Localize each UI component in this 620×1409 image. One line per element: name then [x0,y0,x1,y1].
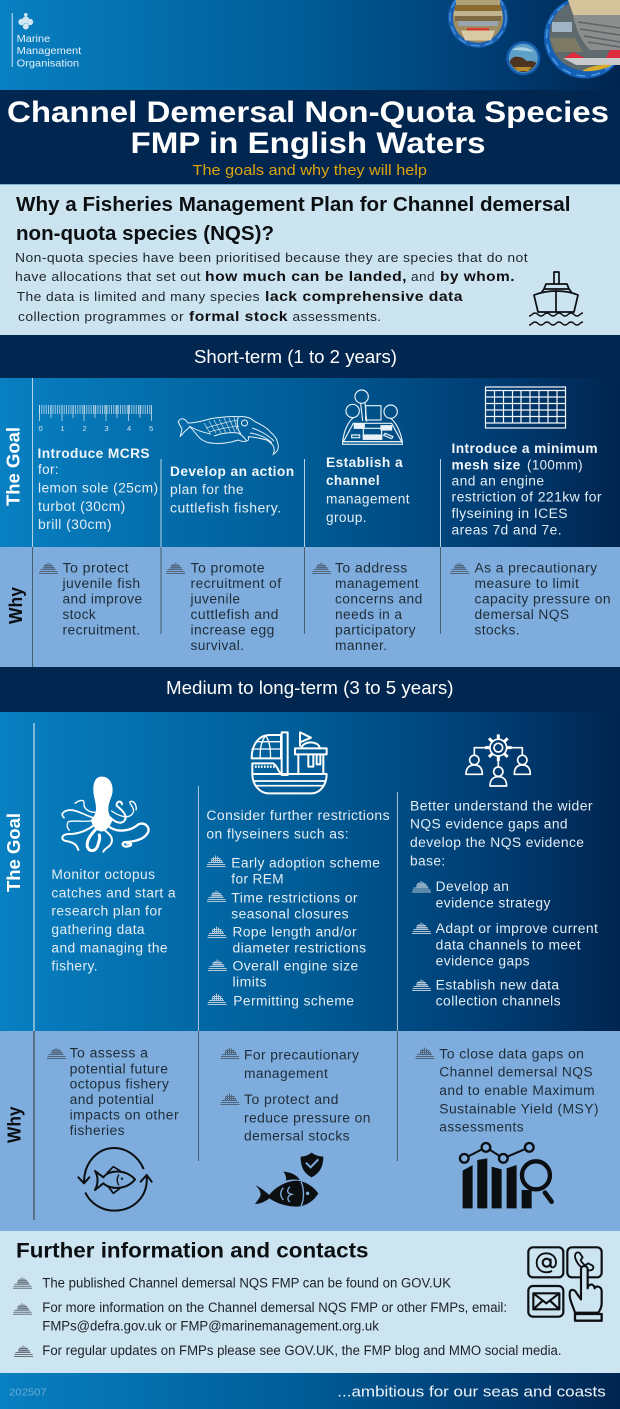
footer band [0,1373,620,1409]
goal: cuttlefish: Develop an action [170,464,294,479]
icon: octopus [62,777,148,852]
why: protect juvenile fish: To protect [62,560,129,575]
photo: harbour [448,0,508,48]
subtitle: The goals and why they will help [192,162,427,179]
main title: FMP in English Waters [130,127,486,160]
panel: medium to long-term why [0,1031,620,1231]
why: octopus fishery: To assess a [70,1046,148,1061]
icon: ruler: 4 [127,424,131,433]
goal: MCRS [38,405,158,532]
why: precautionary measure [450,560,611,638]
heading: Further information and contacts [16,1240,368,1263]
why: close data gaps: Sustainable Yield (MSY) [439,1101,599,1116]
goal: channel management group: Establish a [326,455,403,470]
goal: further restrictions on flyseiners: Time restrictions or [231,890,358,905]
why: close data gaps: assessments [439,1120,524,1135]
label: The Goal: The Goal [2,427,24,506]
why: precautionary management: demersal stocks [244,1129,350,1144]
why: protect juvenile fish: and improve [62,592,142,606]
goal: further restrictions on flyseiners: Rope length and/or [232,925,357,940]
goal: minimum mesh size: and an engine [452,474,544,489]
goal: MCRS: Introduce MCRS [38,446,150,461]
goal: evidence base: NQS evidence gaps and [410,817,568,832]
icon: people round a table [343,390,402,444]
goal: MCRS: turbot (30cm) [38,499,126,514]
why: protect juvenile fish: stock [62,607,96,622]
goal: further restrictions on flyseiners: seasonal closures [231,907,349,922]
why: octopus fishery: fisheries [70,1123,125,1138]
goal: monitor octopus: and managing the [51,940,168,955]
why: participatory management: management [335,576,419,591]
intro text: how much can be landed, [205,269,407,284]
goal: minimum mesh size: (100mm) [527,457,583,472]
panel: short-term goals [0,378,620,547]
panel: short-term why [0,547,620,667]
main title [7,96,609,160]
goal: further restrictions on flyseiners: diameter restrictions [232,941,366,956]
intro text: formal stock [189,309,288,324]
intro text: lack comprehensive data [265,289,463,304]
why: octopus fishery: impacts on other [70,1108,179,1123]
goal: MCRS: brill (30cm) [38,517,112,532]
why: precautionary management: management [244,1066,328,1081]
contact item: GOV.UK publication: The published Channel demersal NQS FMP can be found on GOV.UK [42,1275,451,1290]
icon: ruler: 3 [104,424,109,433]
intro text: Non-quota species have been prioritised because they are species that do not [15,250,528,265]
contact item: email: FMPs@defra.gov.uk or FMP@marinemanagement.org.uk [42,1318,379,1333]
why: participatory management: participatory [335,622,416,638]
goal: MCRS: lemon sole (25cm) [38,481,158,496]
goal: cuttlefish [170,416,294,516]
goal: further restrictions on flyseiners: Early adoption scheme [231,855,380,870]
title band [0,90,620,184]
goal: monitor octopus: fishery. [51,959,98,974]
icon: fishing vessel [252,732,327,793]
goal: minimum mesh size: areas 7d and 7e. [452,522,562,537]
why: participatory management: concerns and [335,592,423,606]
section heading: short-term: Short-term (1 to 2 years) [194,346,397,367]
goal: evidence base: base: [410,853,446,868]
intro text: The data is limited and many species [17,289,260,304]
intro text [15,250,528,324]
why: precautionary measure: As a precautionary [474,560,598,575]
icon: ruler: 1 [60,424,65,433]
icon: ship on waves [529,272,583,325]
contact item: email: For more information on the Channel demersal NQS FMP or other FMPs, email: [42,1300,507,1315]
logo: Marine Management Organisation: Organisation [17,57,79,69]
goal: further restrictions on flyseiners: Overall engine size [232,958,359,973]
why: precautionary measure: measure to limit [474,576,579,591]
goal: evidence base: develop the NQS evidence [410,835,584,850]
goal: evidence base: collection channels [436,994,561,1009]
contact item: email [13,1300,507,1333]
why: participatory management [312,560,423,653]
goal: monitor octopus [51,777,176,974]
icon: cuttlefish [178,416,278,454]
why: octopus fishery: octopus fishery [70,1077,169,1092]
panel: why a fisheries management plan [0,184,620,335]
why: precautionary management: For precautionary [244,1048,359,1063]
why: precautionary measure: capacity pressure on [474,592,611,606]
goal: minimum mesh size: restriction of 221kw for [452,490,602,505]
goal: evidence base: evidence strategy [436,896,551,911]
goal: evidence base: Adapt or improve current [436,921,598,936]
contact item: updates: For regular updates on FMPs please see GOV.UK, the FMP blog and MMO social media. [42,1343,562,1358]
why: precautionary measure: stocks. [474,622,520,638]
goal: further restrictions on flyseiners: Permitting scheme [233,993,354,1008]
panel: further information and contacts [0,1231,620,1373]
goal: evidence base: data channels to meet [436,937,581,952]
icon: ruler: 5 [149,424,153,433]
intro text: and [411,269,435,284]
intro text: collection programmes or [18,309,184,324]
goal: evidence base: Establish new data [436,977,560,992]
goal: channel management group [326,390,410,525]
header banner [0,0,620,90]
goal: evidence base: Develop an [436,879,509,894]
goal: monitor octopus: gathering data [51,922,145,937]
goal: MCRS: for: [38,462,59,477]
why: octopus fishery: and potential [70,1092,154,1107]
why: precautionary management [220,1048,371,1207]
goal: channel management group: channel [326,473,380,488]
label: The Goal: The Goal [3,813,24,892]
icon: fish in cycle arrows [78,1148,152,1211]
icon: ruler: 2 [82,424,87,433]
goal: channel management group: management [326,491,410,506]
icon: gear with three people [466,734,530,786]
why: protect juvenile fish: recruitment. [62,622,140,638]
section heading: short-term [0,335,620,378]
goal: minimum mesh size: Introduce a minimum [452,441,598,456]
why: close data gaps: and to enable Maximum [439,1083,595,1098]
why: cuttlefish recruitment: juvenile [189,592,240,606]
logo: Marine Management Organisation [12,13,81,69]
goal: minimum mesh size: flyseining in ICES [452,506,568,521]
why: participatory management: needs in a [335,607,403,622]
goal: further restrictions on flyseiners: Consider further restrictions [206,808,390,823]
goal: cuttlefish: plan for the [170,482,244,497]
intro text: have allocations that set out [15,269,201,284]
photo: reef [506,41,540,75]
why: cuttlefish recruitment: To promote [190,560,265,575]
goal: monitor octopus: Monitor octopus [51,867,155,882]
goal: further restrictions on flyseiners: for REM [231,871,284,886]
why: close data gaps: Channel demersal NQS [439,1065,593,1080]
photo: fishing net catch [544,0,620,78]
label: Why: Why [5,586,26,624]
goal: further restrictions on flyseiners: on flyseiners such as: [206,826,349,841]
goal: monitor octopus: research plan for [51,904,163,919]
why: close data gaps [415,1046,599,1208]
goal: further restrictions on flyseiners: limits [232,974,267,989]
label: Why: Why [4,1106,24,1143]
heading [16,194,570,245]
why: octopus fishery [47,1046,179,1211]
why: precautionary measure: demersal NQS [474,607,569,622]
logo: Marine Management Organisation: Marine [17,33,50,45]
goal: cuttlefish: cuttlefish fishery. [170,501,282,516]
why: protect juvenile fish [39,560,142,638]
goal: channel management group: group. [326,510,367,525]
main title: Channel Demersal Non-Quota Species [7,96,609,129]
why: participatory management: To address [335,560,408,575]
date code: 202507 [9,1387,47,1399]
goal: minimum mesh size: mesh size [452,457,521,472]
section heading: medium to long-term [0,667,620,712]
logo: Marine Management Organisation: Management [17,45,81,57]
why: close data gaps: To close data gaps on [439,1046,584,1061]
why: cuttlefish recruitment [166,560,282,653]
why: cuttlefish recruitment: recruitment of [190,576,282,591]
goal: evidence base: evidence gaps [436,954,530,969]
goal: evidence base: Better understand the wider [410,798,593,813]
panel: medium to long-term goals [0,712,620,1031]
icon: fish with shield [255,1153,323,1207]
section heading: medium to long-term: Medium to long-term (3 to 5 years) [166,677,454,698]
icon: mesh net [486,387,566,428]
icon: contact buttons with pointing hand [528,1247,602,1321]
goal: monitor octopus: catches and start a [51,885,176,900]
icon: ruler: 0 [38,424,43,433]
intro text: assessments. [292,309,382,324]
heading: non-quota species (NQS)? [16,223,274,245]
why: cuttlefish recruitment: survival. [190,638,244,653]
goal: minimum mesh size [452,387,602,537]
heading: Why a Fisheries Management Plan for Channel demersal [16,194,570,216]
why: octopus fishery: potential future [70,1061,168,1076]
goal: evidence base [410,734,598,1009]
icon: bar chart with magnifier [460,1143,552,1208]
strapline: ...ambitious for our seas and coasts [337,1385,606,1401]
icon: ruler [38,405,153,433]
intro text: by whom. [440,269,515,284]
why: cuttlefish recruitment: cuttlefish and [190,607,279,622]
why: precautionary management: reduce pressure on [244,1110,371,1125]
why: precautionary management: To protect and [244,1092,339,1107]
why: cuttlefish recruitment: increase egg [190,622,275,638]
why: protect juvenile fish: juvenile fish [61,576,140,591]
why: participatory management: manner. [335,638,388,653]
goal: further restrictions on flyseiners [206,732,390,1008]
